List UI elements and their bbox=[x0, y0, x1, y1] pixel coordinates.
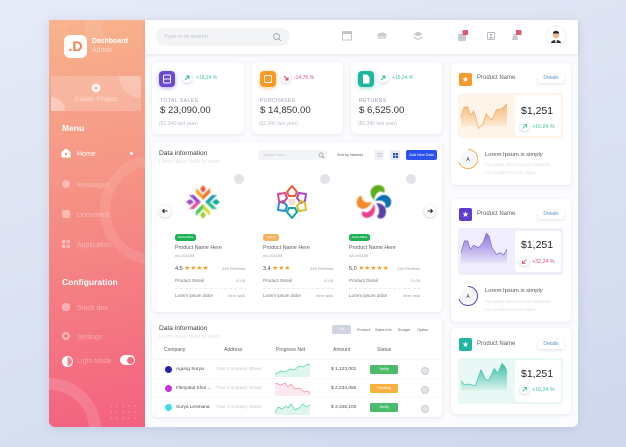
logo: arrows flower bbox=[186, 184, 220, 220]
chart box bbox=[458, 228, 563, 275]
panel: company table bbox=[152, 319, 442, 417]
column: progress: Progress Net bbox=[276, 347, 305, 353]
badge bbox=[263, 234, 279, 241]
menu item: application: Application bbox=[77, 242, 111, 248]
product card: orange bbox=[451, 63, 571, 185]
icon: star tile bbox=[459, 73, 472, 86]
create project panel: Create Project bbox=[75, 96, 117, 103]
company: Agung Surya bbox=[176, 367, 204, 372]
trend arrow bbox=[520, 122, 529, 131]
toggle bbox=[120, 355, 135, 365]
icon: home bbox=[62, 148, 70, 158]
name: Product Name bbox=[477, 341, 515, 347]
status bbox=[370, 365, 398, 374]
dashboard window bbox=[49, 20, 578, 427]
icon: purchases bbox=[257, 69, 279, 91]
menu item: home: Home bbox=[77, 150, 96, 158]
column: status: Status bbox=[377, 347, 391, 353]
icon: application bbox=[62, 240, 70, 248]
sidebar bbox=[49, 20, 145, 427]
divider bbox=[175, 288, 247, 289]
tab: all bbox=[332, 325, 351, 334]
detail value: G-05 bbox=[236, 278, 245, 283]
text line 2: non proident sunt in culpa. bbox=[485, 307, 537, 312]
row label: Lorem ipsum dolor bbox=[349, 293, 387, 298]
icon: bell with badge bbox=[512, 30, 522, 40]
trend arrow bbox=[378, 73, 388, 83]
trend value: +32,24 % bbox=[532, 259, 555, 265]
details button: Details bbox=[543, 341, 559, 347]
trend arrow bbox=[520, 257, 529, 266]
detail label: Product Detail bbox=[263, 278, 292, 283]
list view button bbox=[374, 150, 384, 160]
amount: $ 3,346,100 bbox=[331, 405, 356, 410]
menu item: document: Document bbox=[77, 212, 109, 218]
product card: purple bbox=[451, 199, 571, 322]
icon: mail with badge bbox=[458, 30, 468, 41]
favourite button bbox=[234, 174, 244, 184]
details button bbox=[538, 74, 564, 83]
code: #A-001155 bbox=[349, 253, 368, 258]
icon: star tile bbox=[459, 338, 472, 351]
icon: stack bbox=[62, 303, 70, 311]
product card 3 bbox=[349, 234, 421, 298]
favourite button bbox=[320, 174, 330, 184]
row value: Item data bbox=[403, 293, 420, 298]
status: Verify bbox=[379, 405, 389, 409]
code: #A-001155 bbox=[263, 253, 282, 258]
tab: product: Product bbox=[357, 328, 370, 332]
value panel bbox=[515, 231, 561, 272]
rating: 3.4 ★★★ bbox=[263, 265, 291, 272]
area chart bbox=[460, 232, 508, 263]
logo tile bbox=[64, 35, 87, 58]
progress ring bbox=[458, 286, 478, 306]
logo: swirl bbox=[356, 184, 392, 220]
icon: eye bbox=[421, 366, 429, 374]
sparkline bbox=[275, 364, 310, 377]
icon: document bbox=[62, 210, 70, 218]
avatar bbox=[164, 385, 172, 392]
note: ($1,340 last year) bbox=[259, 121, 298, 127]
previous arrow bbox=[159, 205, 171, 217]
logo: hexagon snowflake bbox=[277, 185, 307, 219]
row label: Lorem ipsum dolor bbox=[175, 293, 213, 298]
trend value: +16,24 % bbox=[196, 75, 217, 81]
tab: all: All bbox=[339, 327, 344, 331]
value panel bbox=[515, 360, 561, 402]
search box bbox=[156, 28, 290, 46]
label: PURCHASES bbox=[260, 98, 296, 104]
menu item: light mode: Light Mode bbox=[77, 358, 112, 364]
detail value: G-05 bbox=[324, 278, 333, 283]
details button bbox=[538, 210, 564, 219]
badge: SOLD bbox=[267, 235, 275, 239]
column: amount: Amount bbox=[333, 347, 350, 353]
icon: star tile: ★ bbox=[462, 340, 469, 349]
tab: option: Option bbox=[417, 328, 428, 332]
tab: budget: Budget bbox=[398, 328, 410, 332]
area chart bbox=[460, 103, 508, 130]
icon: browser bbox=[342, 31, 352, 40]
name: Product Name Here bbox=[175, 245, 222, 251]
product card 1 bbox=[175, 234, 247, 298]
reviews: 245 Reviews bbox=[310, 266, 333, 271]
label: TOTAL SALES bbox=[160, 98, 198, 104]
chart box bbox=[458, 93, 563, 138]
active dot bbox=[130, 152, 133, 155]
detail label: Product Detail bbox=[175, 278, 204, 283]
amount: $ 2,234,050 bbox=[331, 386, 356, 391]
sparkline bbox=[275, 404, 310, 415]
icon: returns bbox=[355, 69, 377, 91]
code: #A-001155 bbox=[175, 253, 194, 258]
company: Surya Lesmana bbox=[176, 405, 210, 410]
icon: star tile: ★ bbox=[462, 75, 469, 84]
status bbox=[370, 384, 398, 393]
trend arrow bbox=[182, 73, 192, 83]
icon: settings bbox=[62, 332, 70, 340]
row label: Lorem ipsum dolor bbox=[263, 293, 301, 298]
trend arrow bbox=[281, 73, 291, 83]
icon: light mode bbox=[62, 356, 73, 367]
rating: 5.0 ★★★★★ bbox=[349, 265, 389, 272]
icon: messages bbox=[62, 180, 70, 188]
name: Product Name bbox=[477, 211, 515, 217]
price: $1,251 bbox=[521, 239, 553, 251]
icon: star tile: ★ bbox=[462, 210, 469, 219]
trend arrow bbox=[520, 385, 529, 394]
brand name: Dashboard bbox=[92, 38, 128, 45]
status bbox=[370, 403, 398, 412]
avatar bbox=[164, 404, 172, 411]
text line 2: non proident sunt in culpa. bbox=[485, 170, 537, 175]
stat card: total sales bbox=[152, 62, 244, 134]
heading: menu: Menu bbox=[62, 123, 84, 133]
badge: AVAILABLE bbox=[178, 235, 193, 239]
address: Your Company Street bbox=[216, 386, 262, 391]
price: $1,251 bbox=[521, 105, 553, 117]
menu item: settings: Settings bbox=[77, 334, 102, 340]
panel: products bbox=[152, 142, 442, 312]
next arrow bbox=[424, 205, 436, 217]
stat card: returns bbox=[351, 62, 442, 134]
icon: profile bbox=[487, 32, 495, 40]
value: $ 14,850.00 bbox=[260, 105, 311, 116]
menu item: stack dev: Stack dev bbox=[77, 304, 108, 312]
value: $ 23,090.00 bbox=[160, 105, 211, 116]
trend value: +16,24 % bbox=[392, 75, 413, 81]
heading: Data information bbox=[159, 324, 207, 332]
progress ring: A bbox=[466, 157, 470, 163]
trend value: +16,24 % bbox=[532, 124, 555, 130]
badge bbox=[175, 234, 196, 241]
add button bbox=[406, 150, 437, 160]
stat card: purchases bbox=[252, 62, 343, 134]
table row 1 bbox=[152, 359, 442, 379]
grid view button bbox=[390, 150, 400, 160]
avatar bbox=[164, 366, 172, 373]
address: Your Company Street bbox=[216, 367, 262, 372]
detail value: G-05 bbox=[411, 278, 420, 283]
table row 3 bbox=[152, 397, 442, 417]
detail label: Product Detail bbox=[349, 278, 378, 283]
icon: stack bbox=[377, 32, 387, 39]
area chart bbox=[460, 362, 508, 390]
note: ($1,340 last year) bbox=[159, 121, 198, 127]
name: Product Name Here bbox=[263, 245, 310, 251]
price: $1,251 bbox=[521, 368, 553, 380]
chart box bbox=[458, 358, 563, 404]
column: company: Company bbox=[164, 347, 185, 353]
progress ring bbox=[458, 149, 478, 169]
heading: Data information bbox=[159, 150, 207, 156]
trend value: -14,76 % bbox=[294, 75, 314, 81]
tab: sales info: Sales info bbox=[375, 328, 392, 332]
sparkline bbox=[275, 382, 310, 396]
favourite button bbox=[406, 174, 416, 184]
note: ($1,340 last year) bbox=[358, 121, 397, 127]
reviews: 245 Reviews bbox=[222, 266, 245, 271]
icon: eye bbox=[421, 386, 429, 394]
value: $ 6,525.00 bbox=[359, 105, 404, 116]
text line 1: Excepteur sint occaecat cupidatat bbox=[485, 162, 551, 167]
icon: sales bbox=[156, 69, 178, 91]
icon: layers bbox=[414, 32, 422, 40]
progress ring: A bbox=[466, 294, 470, 300]
sort dropdown: Sort by Newest bbox=[337, 153, 363, 157]
text heading: Lorem Ipsum is simply bbox=[485, 288, 543, 294]
brand role: Admin bbox=[92, 46, 112, 54]
logo tile: .D bbox=[68, 38, 82, 54]
menu item: messages: Messages bbox=[77, 182, 109, 188]
column: address: Address bbox=[224, 347, 242, 353]
status: Pending bbox=[377, 386, 391, 390]
amount: $ 1,123,001 bbox=[331, 367, 356, 372]
details button bbox=[538, 340, 564, 349]
add button: Add New Data bbox=[409, 153, 434, 157]
search field: Search here.. bbox=[263, 152, 287, 157]
product card: teal bbox=[451, 328, 571, 414]
details button: Details bbox=[543, 211, 559, 217]
subheading: Lorem ipsum dolor sit amet bbox=[159, 334, 219, 340]
name: Product Name Here bbox=[349, 245, 396, 251]
trend value: +16,24 % bbox=[532, 387, 555, 393]
label: RETURNS bbox=[359, 98, 387, 104]
address: Your Company Street bbox=[216, 405, 262, 410]
product card 2 bbox=[263, 234, 334, 298]
status: Verify bbox=[379, 367, 389, 371]
top bar bbox=[145, 20, 578, 54]
name: Product Name bbox=[477, 75, 515, 81]
details button: Details bbox=[543, 75, 559, 81]
company: Fikriyatul Khoi ... bbox=[176, 386, 211, 391]
table row 2 bbox=[152, 378, 442, 398]
search box: Type in to search .. bbox=[164, 34, 213, 40]
heading: configuration: Configuration bbox=[62, 277, 118, 287]
search field bbox=[258, 150, 327, 160]
divider bbox=[263, 288, 334, 289]
subheading: Lorem ipsum dolor sit amet bbox=[159, 159, 219, 165]
rating: 4.5 ★★★★ bbox=[175, 265, 209, 272]
create project panel bbox=[51, 76, 141, 111]
text heading: Lorem Ipsum is simply bbox=[485, 152, 543, 158]
value panel bbox=[515, 95, 561, 136]
avatar bbox=[546, 26, 566, 46]
icon: star tile bbox=[459, 208, 472, 221]
badge bbox=[349, 234, 370, 241]
row value: Item data bbox=[228, 293, 245, 298]
badge: AVAILABLE bbox=[352, 235, 367, 239]
icon: eye bbox=[421, 404, 429, 412]
divider bbox=[349, 288, 421, 289]
row value: Item data bbox=[316, 293, 333, 298]
text line 1: Excepteur sint occaecat cupidatat bbox=[485, 299, 551, 304]
reviews: 245 Reviews bbox=[397, 266, 420, 271]
